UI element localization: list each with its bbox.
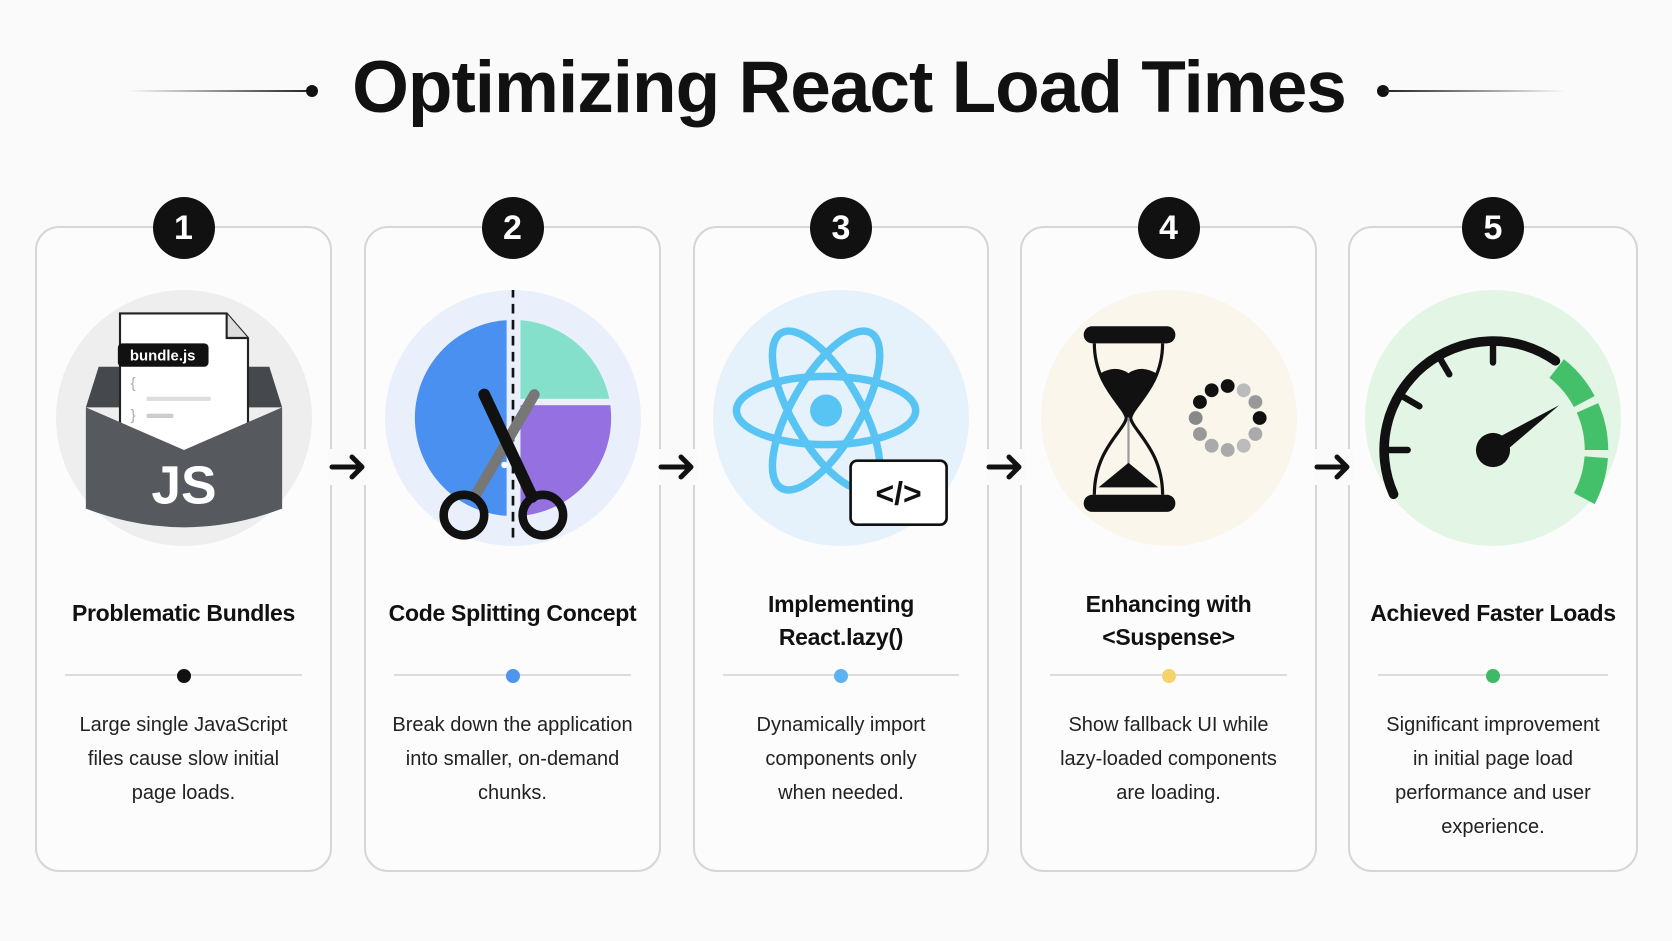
text 1: Large single JavaScript — [80, 714, 287, 736]
text 5: performance and user — [1395, 782, 1591, 804]
icon: js bundle: bundle.js — [129, 347, 195, 364]
number badge 5: 5 — [1484, 209, 1502, 247]
heading 4: Enhancing with — [1086, 591, 1251, 617]
text 4: lazy-loaded components — [1060, 748, 1277, 770]
heading 3: Implementing — [768, 591, 914, 617]
icon: js bundle: } — [130, 407, 135, 424]
icon: js bundle: { — [130, 375, 135, 392]
text 1: files cause slow initial — [88, 748, 279, 770]
icon: js bundle — [56, 290, 312, 546]
heading 1: Problematic Bundles — [72, 600, 295, 626]
marker dot 2 — [506, 669, 520, 683]
arrow 3 — [985, 449, 1025, 485]
marker dot 5 — [1486, 669, 1500, 683]
text 4 — [1060, 714, 1277, 804]
arrow 4 — [1313, 449, 1353, 485]
panel: step 1 — [35, 226, 332, 872]
heading 3 — [768, 591, 914, 650]
number badge 5 — [1462, 197, 1524, 259]
panel: step 3 — [693, 226, 989, 872]
icon: code splitting pie with scissors — [385, 290, 641, 546]
heading 5: Achieved Faster Loads — [1370, 600, 1616, 626]
panel: step 2 — [364, 226, 661, 872]
title: Optimizing React Load Times — [352, 47, 1346, 128]
icon: react atom with code tag: </> — [875, 475, 922, 511]
number badge 1 — [152, 197, 214, 259]
number badge 2 — [482, 197, 544, 259]
number badge 4: 4 — [1159, 209, 1178, 247]
marker dot 3 — [834, 669, 848, 683]
icon: js bundle: JS — [151, 456, 216, 515]
text 5: experience. — [1441, 816, 1545, 838]
text 5 — [1386, 714, 1600, 838]
text 3: Dynamically import — [757, 714, 925, 736]
text 4: are loading. — [1116, 782, 1221, 804]
number badge 3: 3 — [832, 209, 850, 247]
heading 4 — [1086, 591, 1251, 650]
marker dot 4 — [1162, 669, 1176, 683]
text 2: chunks. — [478, 782, 547, 804]
title — [135, 47, 1558, 128]
text 1: page loads. — [132, 782, 235, 804]
icon: react atom with code tag — [713, 290, 969, 546]
marker dot 1 — [176, 669, 190, 683]
text 5: Significant improvement — [1386, 714, 1600, 736]
heading 4: <Suspense> — [1102, 624, 1235, 650]
text 5: in initial page load — [1413, 748, 1573, 770]
number badge 4 — [1138, 197, 1200, 259]
text 2: Break down the application — [392, 714, 633, 736]
text 1 — [80, 714, 288, 804]
text 2 — [392, 714, 633, 804]
text 3: when needed. — [778, 782, 904, 804]
text 2: into smaller, on-demand — [406, 748, 619, 770]
arrow 2 — [657, 449, 697, 485]
number badge 3 — [810, 197, 872, 259]
arrow 1 — [328, 449, 368, 485]
text 3 — [757, 714, 926, 804]
icon: speedometer — [1365, 290, 1621, 546]
panel: step 4 — [1020, 226, 1317, 872]
text 4: Show fallback UI while — [1068, 714, 1269, 736]
icon: hourglass and spinner — [1041, 290, 1297, 546]
text 3: components only — [765, 748, 917, 770]
heading 2: Code Splitting Concept — [389, 600, 636, 626]
number badge 1: 1 — [174, 209, 193, 247]
number badge 2: 2 — [503, 209, 522, 247]
panel: step 5 — [1348, 226, 1638, 872]
heading 3: React.lazy() — [779, 624, 903, 650]
